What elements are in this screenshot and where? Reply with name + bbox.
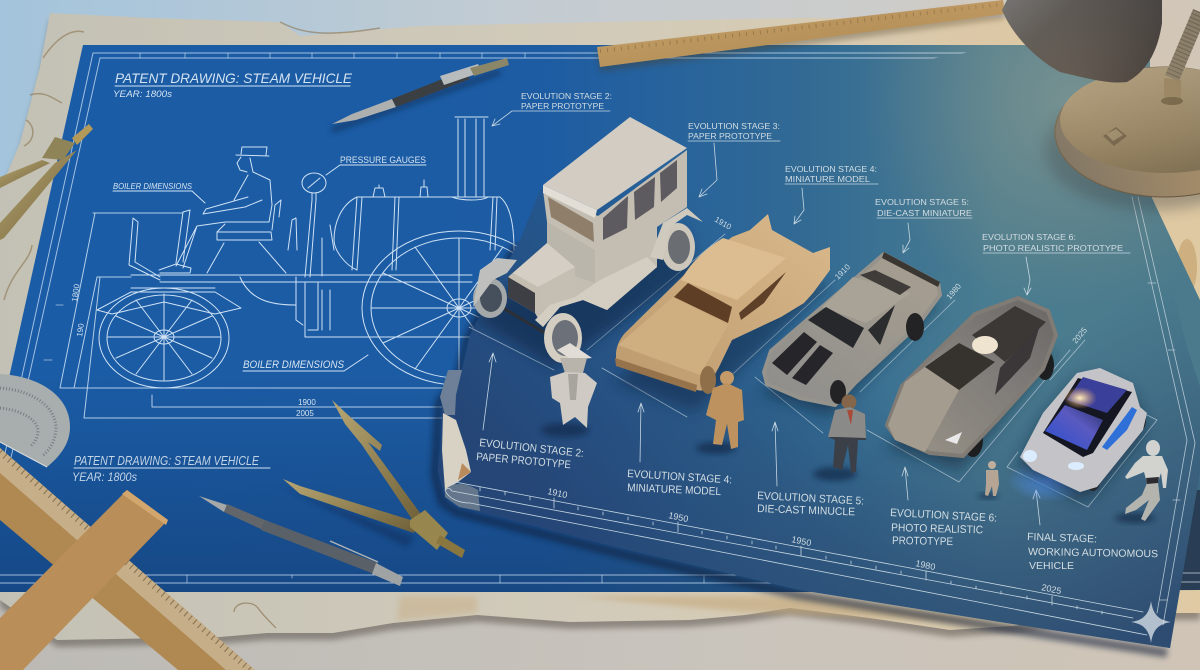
radiator: [508, 277, 535, 313]
stage label: final stage: [1027, 531, 1158, 572]
lower title: PATENT DRAWING: STEAM VEHICLE: [74, 454, 260, 468]
timeline year 2025: 2025: [1041, 582, 1062, 596]
stage label: final stage: VEHICLE: [1029, 560, 1074, 572]
stage label: stage 4 lower: [627, 468, 732, 498]
lamp base: [1045, 67, 1200, 210]
torn curl edge: [440, 370, 480, 511]
dimension 1800: 1800: [70, 283, 82, 302]
lamp arm: [1161, 12, 1200, 105]
roof: [681, 238, 786, 300]
leader lines: [74, 86, 426, 468]
lamp: [1002, 0, 1200, 210]
running board and fender: [535, 257, 657, 327]
ruler top: [597, 0, 1005, 72]
figure: man with grey shirt: [813, 394, 866, 481]
figure: origami man: [541, 343, 597, 437]
compass left: [0, 124, 93, 240]
figure: small man: [978, 461, 999, 499]
year label: YEAR: 1800s: [113, 89, 173, 99]
stage label: stage 4 top: EVOLUTION STAGE 4:: [785, 164, 877, 174]
headlight: [945, 432, 962, 444]
boiler and chimney: [240, 117, 514, 337]
body: [616, 214, 830, 391]
lower year: YEAR: 1800s: [72, 470, 137, 484]
blue glow: [1008, 458, 1092, 502]
stage label: stage 2 lower: [476, 437, 584, 471]
stage label: stage 5 top: [875, 197, 972, 218]
stage label: stage 4 top: MINIATURE MODEL: [785, 174, 870, 184]
grille: [615, 358, 697, 392]
windshield: [674, 283, 732, 323]
windows: [603, 196, 628, 240]
rear wheel: [661, 223, 695, 271]
front right wheel: [544, 313, 582, 363]
stage label: stage 2 top: PAPER PROTOTYPE: [521, 101, 604, 111]
label: boiler dimensions small: BOILER DIMENSIONS: [113, 182, 193, 191]
arrows: lower stage callouts: [483, 353, 1040, 525]
timeline: [445, 482, 1147, 635]
hood top: [513, 243, 575, 287]
upper glass: [1067, 377, 1127, 413]
car 2: wooden miniature: [614, 214, 830, 412]
car 5: autonomous vehicle: [1008, 368, 1147, 502]
stage label: stage 6 top: EVOLUTION STAGE 6:: [982, 232, 1076, 242]
figure: tan man: [696, 371, 744, 454]
label: boiler dimensions: BOILER DIMENSIONS: [243, 359, 345, 371]
sheet shadow: [435, 245, 1167, 653]
stage label: stage 4 lower: MINIATURE MODEL: [627, 482, 721, 498]
windshield: [925, 343, 995, 390]
stage label: stage 2 lower: EVOLUTION STAGE 2:: [479, 437, 584, 460]
car year dimensions: [713, 215, 1089, 345]
warm lamp light: [860, 0, 1200, 310]
stage label: stage 4 lower: EVOLUTION STAGE 4:: [627, 468, 732, 486]
rear small wheel: [97, 288, 241, 388]
title: patent drawing: PATENT DRAWING: STEAM VEHICLE: [115, 70, 353, 86]
stage label: stage 2 top: [521, 91, 612, 111]
ruler: [0, 448, 255, 670]
body underlay: [508, 150, 687, 327]
windshield: [808, 307, 864, 348]
side glass: [995, 325, 1040, 395]
stage label: final stage: FINAL STAGE:: [1027, 531, 1097, 545]
timeline year 1980: 1980: [915, 558, 936, 572]
stage label: stage 6 lower: EVOLUTION STAGE 6:: [890, 507, 997, 525]
dimension 2005: 2005: [296, 409, 314, 418]
under chassis: [503, 308, 545, 333]
stage label: stage 5 top: EVOLUTION STAGE 5:: [875, 197, 969, 207]
car year dimensions: 2025: [1071, 325, 1089, 345]
stage label: stage 4 top: [785, 164, 877, 184]
T-square and ruler: [0, 448, 255, 670]
dimension 190: 190: [75, 322, 86, 337]
car year dimensions: 1910: [833, 262, 852, 281]
hood: [888, 367, 959, 452]
front left wheel: [473, 278, 507, 318]
wheel: [1086, 469, 1100, 491]
stage label: stage 5 lower: DIE-CAST MINUCLE: [757, 503, 855, 518]
pencil top: [332, 58, 509, 130]
stage label: stage 2 top: EVOLUTION STAGE 2:: [521, 91, 612, 101]
car year dimensions: 1980: [945, 281, 963, 301]
rear window and spoiler: [860, 270, 911, 295]
rear fender: [650, 208, 703, 260]
stage label: stage 6 top: [982, 232, 1123, 253]
headlights: [1023, 450, 1037, 462]
blueprint sheet: evolution stages: [435, 45, 1200, 653]
front left fender: [473, 258, 517, 307]
car 1: paper model: [473, 117, 703, 368]
side windows: [739, 272, 786, 320]
body: [887, 298, 1056, 456]
side window: [1102, 407, 1137, 450]
stage label: stage 3 top: [688, 121, 780, 141]
hood: [618, 297, 728, 375]
hood side: [538, 267, 575, 307]
lamp shade: [1002, 0, 1162, 83]
timeline year 1950 second: 1950: [791, 534, 812, 548]
body: [764, 254, 940, 405]
stage label: stage 6 lower: PHOTO REALISTIC: [891, 522, 983, 536]
label: pressure gauges: PRESSURE GAUGES: [340, 155, 426, 165]
driver figure: [129, 147, 286, 280]
roof light: [1063, 387, 1097, 409]
large front wheel: [362, 231, 556, 385]
timeline year 1910: 1910: [547, 486, 568, 500]
lower dark sheet at right: [1176, 490, 1200, 590]
pencil lower: [199, 496, 403, 586]
stage label: stage 3 top: EVOLUTION STAGE 3:: [688, 121, 780, 131]
stage label: stage 6 top: PHOTO REALISTIC PROTOTYPE: [983, 243, 1123, 253]
dimension 1900: 1900: [298, 398, 316, 407]
timeline year 1950: 1950: [668, 510, 689, 524]
car 4: photorealistic prototype: [885, 298, 1056, 470]
right frame lines: [1132, 197, 1195, 625]
cowl: [547, 222, 595, 283]
lamp backdrop: [1150, 0, 1200, 80]
dark screen: [1043, 378, 1132, 457]
side window: [868, 305, 895, 345]
roof: [822, 277, 911, 323]
stage label: stage 6 lower: PROTOTYPE: [892, 535, 953, 548]
stage label: final stage: WORKING AUTONOMOUS: [1028, 546, 1158, 560]
car bay dimension lines: [469, 234, 1157, 507]
wheel: [906, 313, 924, 341]
protractor: [0, 374, 70, 467]
stage label: stage 2 lower: PAPER PROTOTYPE: [476, 451, 571, 471]
dimension lines: [60, 213, 445, 418]
wheel: [700, 366, 716, 394]
stage label: stage 6 lower: [890, 507, 997, 548]
stage label: stage 5 top: DIE-CAST MINIATURE: [877, 208, 972, 218]
arrows: top stage callouts: [492, 111, 1130, 295]
roof highlight: [972, 336, 998, 354]
body: [1020, 368, 1147, 492]
car year dimensions: 1910: [713, 215, 733, 232]
glass roof: [972, 306, 1046, 362]
wheels: [1036, 350, 1054, 380]
blueprint drawing: steam vehicle: [60, 70, 556, 484]
roof: [543, 117, 687, 210]
hood panels: [772, 332, 817, 375]
interior: [1045, 405, 1103, 450]
chassis: [131, 275, 472, 282]
compass lower: [280, 400, 465, 558]
car 3: die-cast: [760, 252, 940, 416]
pressure gauge: [288, 173, 334, 277]
stage label: stage 3 top: PAPER PROTOTYPE: [688, 131, 772, 141]
cross bar: [0, 490, 168, 670]
stage label: stage 5 lower: EVOLUTION STAGE 5:: [757, 490, 864, 508]
sparkle mark: [1131, 601, 1171, 643]
windshield: [548, 197, 594, 242]
figure: robot: [1115, 440, 1168, 523]
stage label: stage 5 lower: [757, 490, 864, 518]
